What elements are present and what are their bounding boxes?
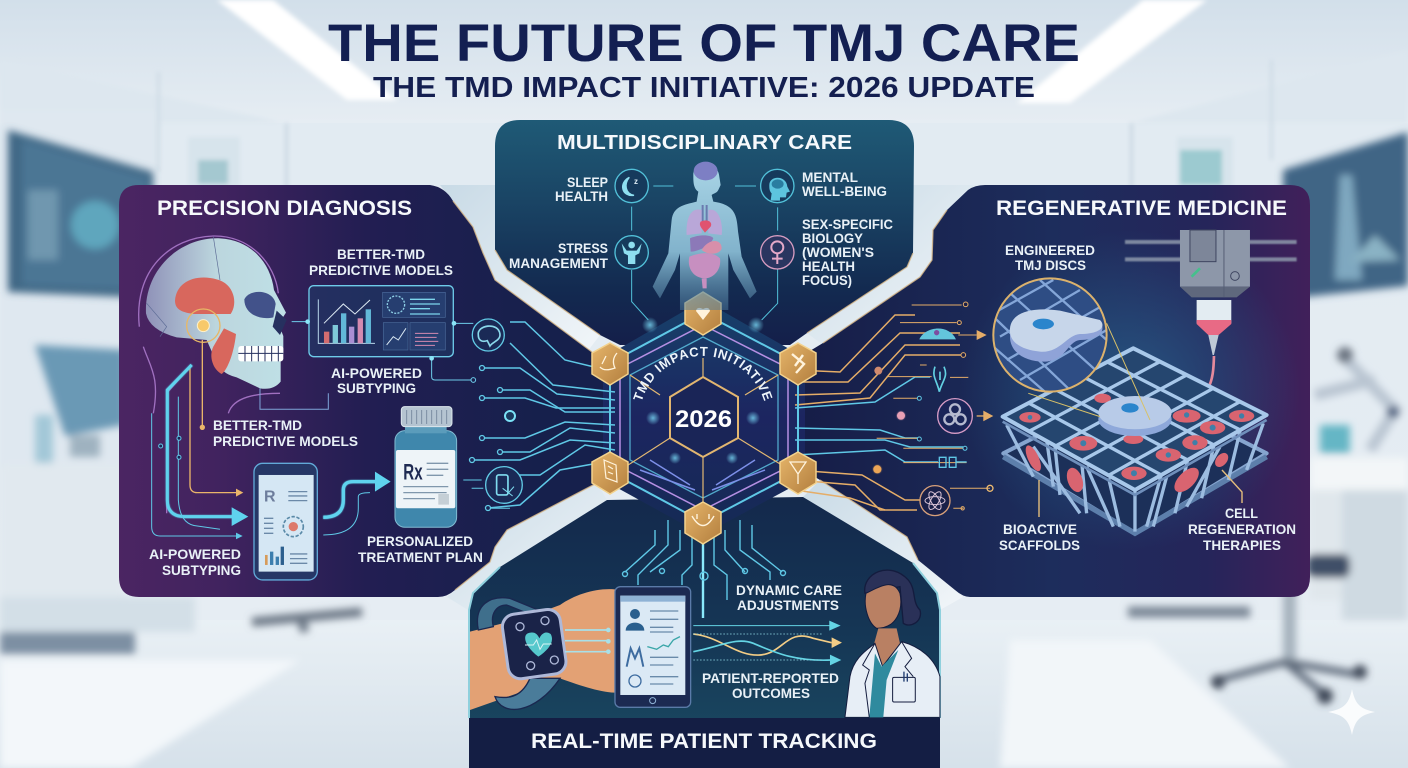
label: sex-specific biology (802, 216, 893, 288)
icon: sleep health: z (634, 177, 638, 186)
label: better-tmd predictive models lower: BETTER-TMD (213, 417, 302, 433)
white separator strips between panels (440, 185, 975, 610)
label: patient-reported outcomes (702, 670, 839, 701)
gold panel edges (453, 201, 947, 590)
label: engineered tmj discs: ENGINEERED (1005, 242, 1095, 258)
label: sleep health: SLEEP (567, 174, 608, 190)
panel: real-time patient tracking background (469, 497, 940, 768)
left chair base (252, 612, 362, 632)
arrows: data flow to clinician (693, 621, 842, 665)
label: dynamic care adjustments: DYNAMIC CARE (736, 582, 842, 598)
blue glow in regenerative panel (960, 230, 1300, 550)
label: cell regeneration therapies: CELL (1225, 505, 1258, 521)
icon: tablet with patient record (565, 587, 691, 707)
icon: stress management (615, 236, 648, 269)
label: personalized treatment plan: PERSONALIZED (367, 533, 473, 549)
illustration: skull with TMJ highlight (139, 236, 328, 539)
hub: gold hexagon lower right (780, 452, 816, 494)
illustration: analytics dashboard (292, 286, 476, 382)
label: better-tmd predictive models top: BETTER-TMD (337, 246, 425, 262)
left counter (0, 463, 125, 603)
panel: multidisciplinary care background (495, 120, 914, 345)
subtitle: THE TMD IMPACT INITIATIVE: 2026 UPDATE (373, 72, 1035, 104)
panel content: precision diagnosis (139, 197, 522, 580)
circuit dots left (470, 366, 502, 510)
label: stress management: STRESS (558, 240, 608, 256)
title band of tracking panel (469, 718, 940, 768)
floor reflections (0, 660, 300, 768)
arrow: phone to prescription (323, 472, 391, 535)
title: THE FUTURE OF TMJ CARE (328, 14, 1080, 73)
hub: inner gold hexagon (670, 377, 738, 457)
icon: smartphone with plan (254, 463, 317, 580)
panel content: real-time patient tracking (470, 570, 940, 753)
icon: phone crossed in circle (463, 467, 522, 508)
panel content: regenerative medicine (873, 197, 1297, 553)
label: ai-powered subtyping lower (149, 546, 241, 578)
icon: sleep health (615, 169, 673, 320)
hub: central hexagon background (603, 300, 805, 535)
circuit icons right (873, 302, 993, 516)
illustration: wrist with smartwatch (470, 589, 620, 710)
hub: gold hexagon upper left (592, 343, 628, 385)
icon: prescription bottle (395, 407, 457, 527)
label: better-tmd predictive models top: PREDICTIVE MODELS (309, 262, 453, 278)
right desk and microscope (1310, 458, 1408, 490)
label: engineered tmj discs (1005, 242, 1095, 273)
icon: mental well-being (735, 169, 794, 320)
label: mental well-being: WELL-BEING (802, 183, 887, 199)
icon: sex-specific biology (761, 236, 794, 269)
illustration: 3D bioprinter nozzle (1125, 230, 1297, 403)
label: ai-powered subtyping top: AI-POWERED (331, 365, 422, 381)
label: stress management: MANAGEMENT (509, 255, 608, 271)
label: personalized treatment plan (358, 533, 483, 565)
label: patient-reported outcomes: OUTCOMES (732, 685, 810, 701)
label: dynamic care adjustments: ADJUSTMENTS (737, 597, 839, 613)
illustration: human body with organs (653, 162, 757, 310)
circuit line: main pink beam right (795, 414, 930, 418)
icon: brain in circle (472, 319, 504, 351)
label: stress management (509, 240, 608, 271)
label: ai-powered subtyping top (331, 365, 422, 396)
panel content: multidisciplinary care (509, 132, 893, 320)
hub: gold hexagon bottom (685, 502, 721, 544)
callout lines for scaffold and cells (1039, 470, 1242, 517)
label: cell regeneration therapies (1188, 505, 1296, 553)
circuit lines: left to hub (472, 322, 615, 508)
heading: REGENERATIVE MEDICINE (996, 197, 1287, 220)
heading: real-time patient tracking: REAL-TIME PATIENT TRACKING (531, 730, 877, 753)
label: better-tmd predictive models lower (213, 417, 358, 449)
label: ai-powered subtyping top: SUBTYPING (337, 380, 416, 396)
posters on the wall (188, 137, 240, 187)
hub: glowing nodes (642, 317, 764, 464)
illustration: clinician (845, 570, 940, 717)
label: sex-specific biology: HEALTH (802, 258, 855, 274)
label: sleep health (555, 174, 608, 204)
label: mental well-being: MENTAL (802, 169, 858, 185)
panel: precision diagnosis background (119, 185, 615, 597)
label: ai-powered subtyping lower: AI-POWERED (149, 546, 241, 562)
label: personalized treatment plan: TREATMENT PLAN (358, 549, 483, 565)
hub: hexagon wiring (610, 313, 798, 522)
right monitor (1283, 132, 1408, 299)
label: sex-specific biology: SEX-SPECIFIC (802, 216, 893, 232)
heading: MULTIDISCIPLINARY CARE (557, 132, 852, 154)
label: cell regeneration therapies: THERAPIES (1203, 537, 1281, 553)
hub: gold hexagon upper right (780, 343, 816, 385)
label: engineered tmj discs: TMJ DISCS (1015, 257, 1086, 273)
icon: prescription bottle: Rx (403, 459, 423, 484)
circuit lines: hub to right (795, 315, 963, 510)
label: sex-specific biology: BIOLOGY (802, 230, 864, 246)
label: mental well-being (802, 169, 887, 199)
label: better-tmd predictive models lower: PREDICTIVE MODELS (213, 433, 358, 449)
hub: gold hexagon lower left (592, 452, 628, 494)
illustration: magnified TMJ disc lens (993, 278, 1150, 420)
label: bioactive scaffolds: SCAFFOLDS (999, 537, 1080, 553)
icon: smartphone with plan: R (264, 489, 276, 506)
label: sex-specific biology: FOCUS) (802, 272, 852, 288)
lower left monitor (35, 345, 125, 436)
circuit line: main cyan beam left (461, 414, 612, 418)
icon: corner sparkle watermark (1328, 689, 1375, 735)
stool and chair base (1307, 554, 1350, 578)
label: ai-powered subtyping lower: SUBTYPING (162, 562, 241, 578)
label: bioactive scaffolds: BIOACTIVE (1003, 521, 1077, 537)
panel: regenerative medicine background (795, 185, 1310, 597)
heading: PRECISION DIAGNOSIS (157, 197, 412, 220)
hub: year: 2026 (675, 406, 732, 433)
illustration: bioactive scaffold lattice (1003, 348, 1267, 533)
label: dynamic care adjustments (736, 582, 842, 613)
hub: gold hexagon top (685, 292, 721, 335)
circuit lines: hub to tracking panel (622, 520, 786, 618)
label: better-tmd predictive models top (309, 246, 453, 278)
label: cell regeneration therapies: REGENERATION (1188, 521, 1296, 537)
label: sleep health: HEALTH (555, 188, 608, 204)
cyan edges of tracking panel (469, 563, 940, 718)
hub: curved initiative label: TMD IMPACT INITIATIVE (633, 346, 772, 401)
beam node left (505, 411, 515, 421)
left monitor (8, 130, 153, 298)
label: patient-reported outcomes: PATIENT-REPORTED (702, 670, 839, 686)
label: sex-specific biology: (WOMEN'S (802, 244, 874, 260)
label: bioactive scaffolds (999, 521, 1080, 553)
